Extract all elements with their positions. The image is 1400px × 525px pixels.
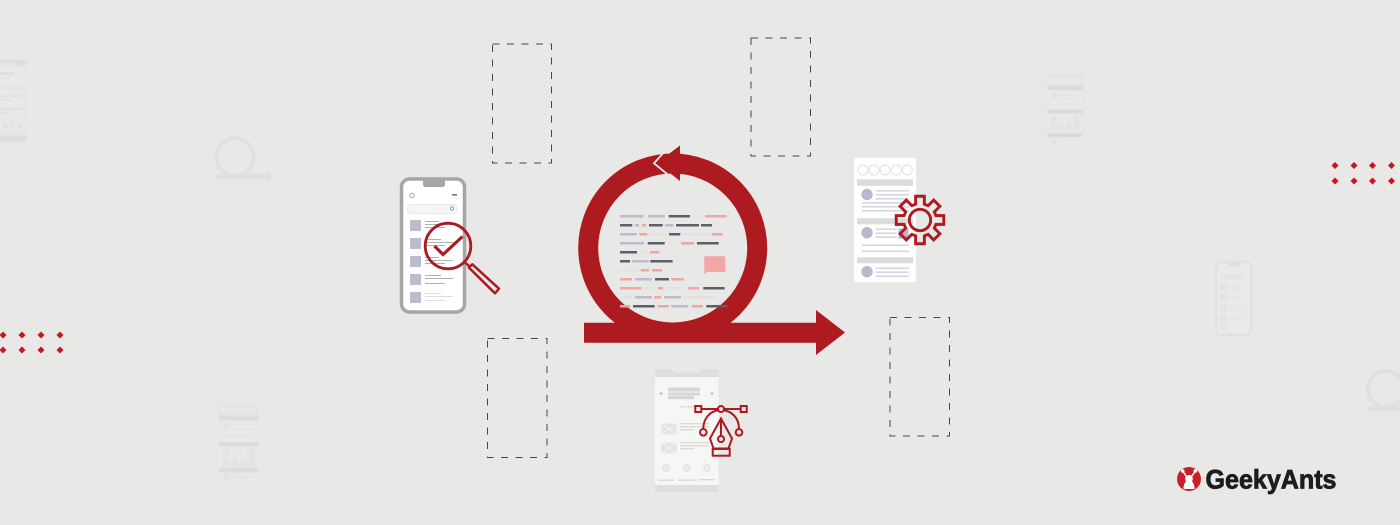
phone body (402, 179, 464, 312)
placeholder text (680, 423, 709, 449)
straight arrow (584, 310, 845, 355)
backlog text lines (620, 215, 728, 308)
text lines (862, 190, 909, 277)
bottom bar (655, 485, 718, 492)
screen card (655, 369, 718, 492)
faint loop icon: left (216, 134, 273, 182)
faint loop icon: right edge (1367, 371, 1400, 411)
document card (854, 158, 916, 282)
red diamonds: left (0, 332, 64, 354)
loop arrowhead (657, 146, 680, 181)
logo mark (1177, 467, 1201, 491)
small image icons (662, 464, 711, 472)
menu icon (452, 194, 457, 196)
dashed placeholder: top right (751, 38, 810, 156)
notch cutout (672, 369, 701, 372)
search glyph (450, 207, 454, 210)
magnifier (425, 223, 471, 269)
speech bubble (704, 256, 725, 274)
title lines (668, 388, 700, 399)
red diamonds: right (1332, 162, 1395, 184)
list text lines (425, 221, 453, 284)
dashed placeholder: bottom right (890, 318, 950, 436)
caption lines (658, 479, 715, 481)
avatars (861, 189, 908, 277)
gear icon (896, 196, 944, 244)
GeekyAnts logo (1177, 464, 1336, 494)
phone notch (423, 179, 445, 187)
check mark (434, 236, 462, 254)
dashed placeholder: top left (492, 44, 552, 163)
home icon (410, 193, 414, 198)
list thumbnails (410, 220, 421, 303)
faint wireframe: feed screen bottom left (218, 403, 259, 485)
faint wireframe: feed screen top right (1047, 73, 1084, 149)
faint phone wireframe: right (1216, 262, 1251, 335)
pager dots (680, 406, 696, 408)
faint wireframe: cropped screen at left edge (0, 60, 27, 142)
logo wordmark: GeekyAnts (1206, 464, 1336, 494)
dashed placeholder: bottom left (488, 338, 547, 458)
loop arrowhead separator (654, 150, 672, 178)
search box (408, 204, 457, 214)
agile sprint loop with arrow (584, 146, 845, 355)
phone with magnifier and check mark (402, 179, 499, 312)
side dots (660, 392, 662, 395)
pen tool icon (695, 406, 747, 456)
document with gear icon (854, 158, 944, 282)
top bar with notch (655, 369, 718, 377)
image placeholders (661, 423, 677, 454)
tab circles (858, 165, 912, 175)
loop ring (588, 164, 757, 332)
section bars (857, 179, 913, 263)
wireframe screen with pen tool icon (655, 369, 747, 492)
